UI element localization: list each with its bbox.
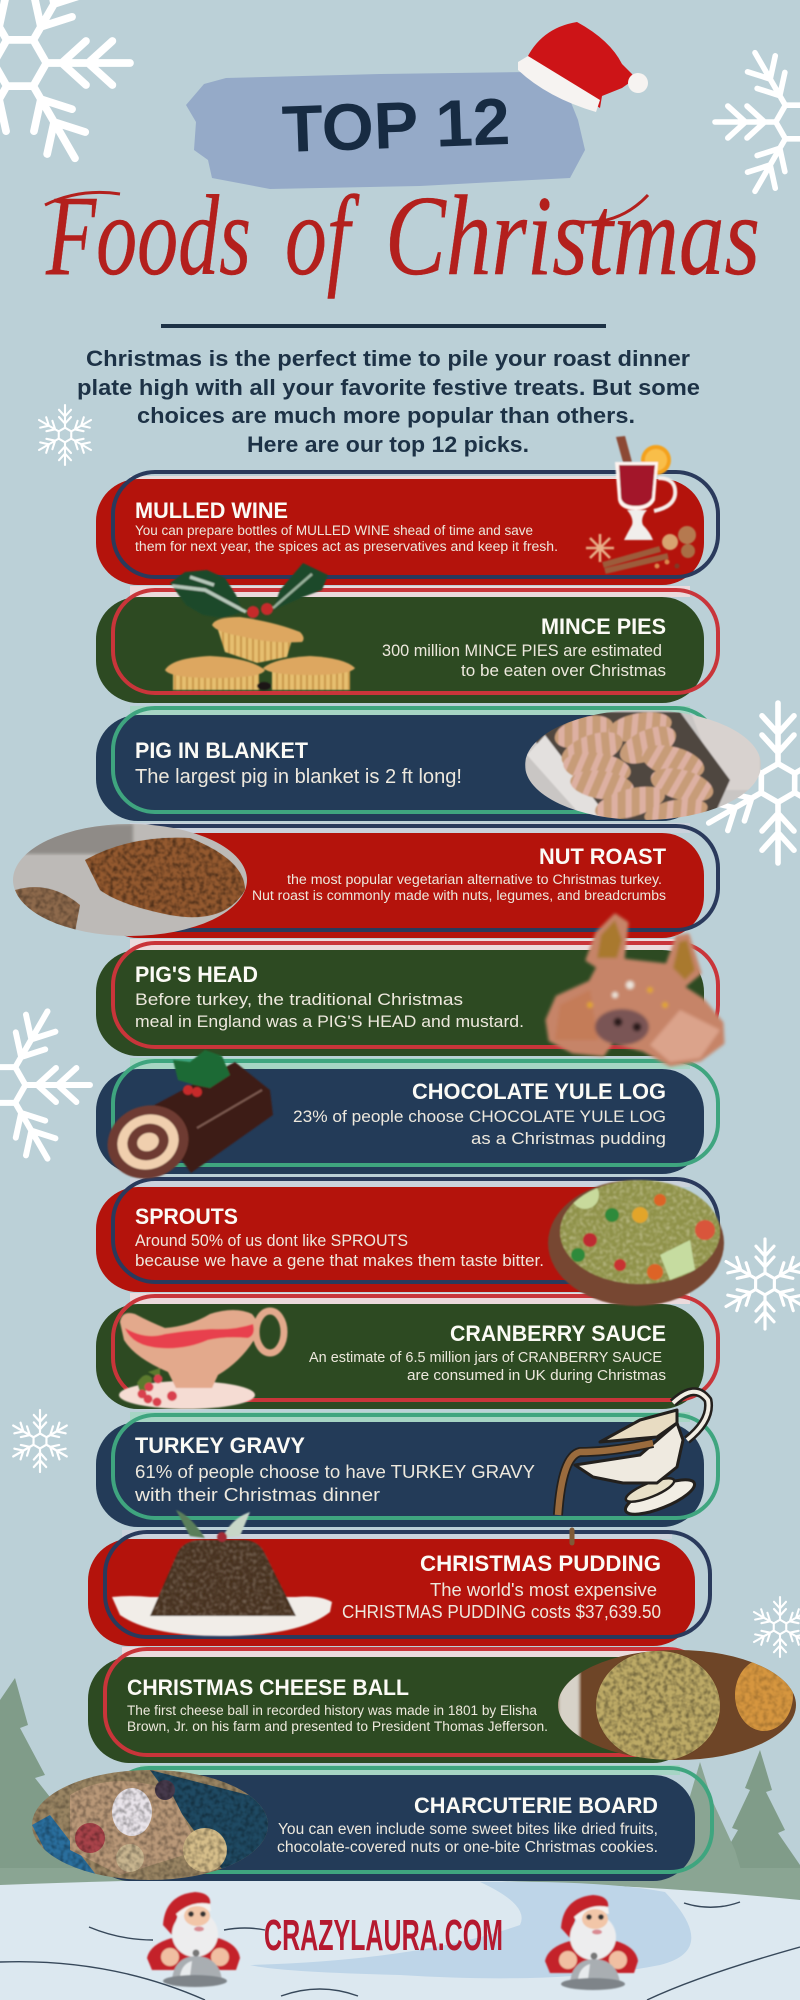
- text: gravy fact: 61% of people choose to have TURKEY GRAVY: [135, 1462, 535, 1482]
- text: pudding fact: CHRISTMAS PUDDING costs $37,639.50: [342, 1602, 661, 1622]
- image: sprouts salad bowl: [548, 1178, 725, 1306]
- snowflake small lower left: [0, 1400, 82, 1482]
- text: cheese ball fact: The first cheese ball in recorded history was made in 1801 by Elisha: [127, 1703, 537, 1718]
- panel 5: pig's head: [96, 939, 718, 1056]
- text: yule log fact: [293, 1107, 666, 1148]
- text: mince pies fact: 300 million MINCE PIES are estimated: [382, 642, 662, 660]
- text: nut roast fact: [252, 872, 666, 903]
- panel 11: christmas cheese ball: [88, 1647, 710, 1763]
- heading: sprouts: SPROUTS: [135, 1204, 238, 1229]
- text: yule log fact: as a Christmas pudding: [471, 1129, 666, 1148]
- text: charcuterie fact: chocolate-covered nuts or one-bite Christmas cookies.: [277, 1839, 658, 1856]
- intro text: Here are our top 12 picks.: [247, 432, 529, 457]
- background trees: [0, 1678, 800, 1900]
- text: cranberry fact: are consumed in UK during Christmas: [407, 1368, 666, 1384]
- panel 6: chocolate yule log: [96, 1058, 718, 1174]
- text: pudding fact: The world's most expensive: [430, 1580, 657, 1600]
- text: gravy fact: with their Christmas dinner: [134, 1485, 380, 1505]
- image: mince pies with holly: [165, 563, 355, 690]
- text: pig in blanket fact: The largest pig in blanket is 2 ft long!: [135, 766, 462, 788]
- heading: christmas cheese ball: CHRISTMAS CHEESE BALL: [127, 1675, 409, 1700]
- heading: mulled wine: MULLED WINE: [135, 498, 288, 523]
- image: turkey gravy boat: [558, 1392, 709, 1543]
- snowflake right middle: [670, 676, 800, 890]
- footer brand text: CRAZYLAURA.COM: [264, 1911, 503, 1960]
- panel 3: pig in blanket: [96, 706, 718, 821]
- image: nut roast photo: [13, 824, 247, 936]
- intro text: [77, 346, 700, 457]
- text: yule log fact: 23% of people choose CHOCOLATE YULE LOG: [293, 1107, 666, 1126]
- snowy ground: [0, 1878, 800, 2000]
- panel 7: sprouts: [96, 1178, 718, 1292]
- snowflake small right: [740, 1587, 800, 1667]
- heading: pig in blanket: PIG IN BLANKET: [135, 738, 309, 763]
- text: mulled wine fact: them for next year, the spices act as preservatives and keep it fresh.: [135, 539, 558, 554]
- image: chocolate yule log: [97, 1050, 273, 1190]
- heading: pig's head: PIG'S HEAD: [135, 962, 258, 987]
- image: roast pig's head: [547, 915, 723, 1065]
- text: cranberry fact: An estimate of 6.5 million jars of CRANBERRY SAUCE: [309, 1350, 662, 1366]
- title: Foods of Christmas: [45, 172, 760, 299]
- text: pig's head fact: meal in England was a PIG'S HEAD and mustard.: [135, 1012, 524, 1031]
- panel 1: mulled wine: [96, 472, 718, 585]
- text: sprouts fact: Around 50% of us dont like SPROUTS: [135, 1232, 408, 1250]
- image: cheese ball photo: [558, 1650, 798, 1761]
- text: mince pies fact: to be eaten over Christmas: [461, 662, 666, 680]
- image: cranberry sauce boat: [119, 1310, 284, 1409]
- footer santa left: [147, 1892, 240, 1987]
- text: charcuterie fact: You can even include some sweet bites like dried fruits,: [278, 1821, 658, 1838]
- snowflake top right: [715, 45, 800, 199]
- snowflake top left: [0, 0, 130, 169]
- text: pig's head fact: [135, 990, 524, 1031]
- heading: cranberry sauce: CRANBERRY SAUCE: [450, 1321, 666, 1346]
- divider line: [161, 324, 606, 328]
- footer santa right: [545, 1895, 638, 1990]
- text: cheese ball fact: [127, 1703, 548, 1734]
- text: mulled wine fact: You can prepare bottles of MULLED WINE shead of time and save: [135, 523, 533, 538]
- panel 4: nut roast: [96, 823, 718, 938]
- text: cranberry fact: [309, 1350, 666, 1384]
- text: charcuterie fact: [277, 1821, 658, 1856]
- icon: santa hat: [518, 22, 648, 112]
- intro text: plate high with all your favorite festive treats. But some: [77, 375, 700, 400]
- text: pudding fact: [342, 1580, 661, 1622]
- intro text: choices are much more popular than others.: [137, 403, 635, 428]
- title: Foods of Christmas: of: [285, 172, 360, 299]
- text: sprouts fact: [135, 1232, 544, 1270]
- snowflake left middle: [0, 1003, 90, 1167]
- text: gravy fact: [134, 1462, 535, 1505]
- heading: mince pies: MINCE PIES: [541, 614, 666, 639]
- text: mulled wine fact: [135, 523, 558, 554]
- panel 9: turkey gravy: [96, 1412, 718, 1527]
- text: cheese ball fact: Brown, Jr. on his farm and presented to President Thomas Jefferson.: [127, 1719, 548, 1734]
- panel 12: charcuterie board: [88, 1765, 712, 1881]
- heading: charcuterie board: CHARCUTERIE BOARD: [414, 1793, 658, 1818]
- heading: top 12: TOP 12: [281, 84, 511, 166]
- snowflake small left: [25, 395, 105, 475]
- heading: turkey gravy: TURKEY GRAVY: [135, 1433, 305, 1458]
- title: Foods of Christmas: Foods: [45, 172, 251, 299]
- panel 8: cranberry sauce: [96, 1293, 718, 1409]
- heading: chocolate yule log: CHOCOLATE YULE LOG: [412, 1079, 666, 1104]
- text: mince pies fact: [382, 642, 666, 680]
- brush stroke behind top 12: [186, 72, 585, 189]
- text: nut roast fact: the most popular vegetarian alternative to Christmas turkey.: [287, 872, 662, 887]
- panel 10: christmas pudding: [88, 1530, 710, 1646]
- text: pig's head fact: Before turkey, the traditional Christmas: [135, 990, 463, 1009]
- image: christmas pudding on plate: [112, 1510, 332, 1636]
- heading: christmas pudding: CHRISTMAS PUDDING: [420, 1551, 661, 1576]
- panel 2: mince pies: [96, 586, 718, 703]
- text: sprouts fact: because we have a gene that makes them taste bitter.: [135, 1252, 544, 1270]
- image: pigs in blankets tray: [525, 708, 761, 829]
- text: nut roast fact: Nut roast is commonly made with nuts, legumes, and breadcrumbs: [252, 888, 666, 903]
- snowflake right lower: [704, 1224, 800, 1344]
- image: mulled wine glass and spices: [586, 436, 696, 571]
- intro text: Christmas is the perfect time to pile your roast dinner: [86, 346, 690, 371]
- heading: nut roast: NUT ROAST: [539, 844, 667, 869]
- image: charcuterie board photo: [32, 1770, 270, 1882]
